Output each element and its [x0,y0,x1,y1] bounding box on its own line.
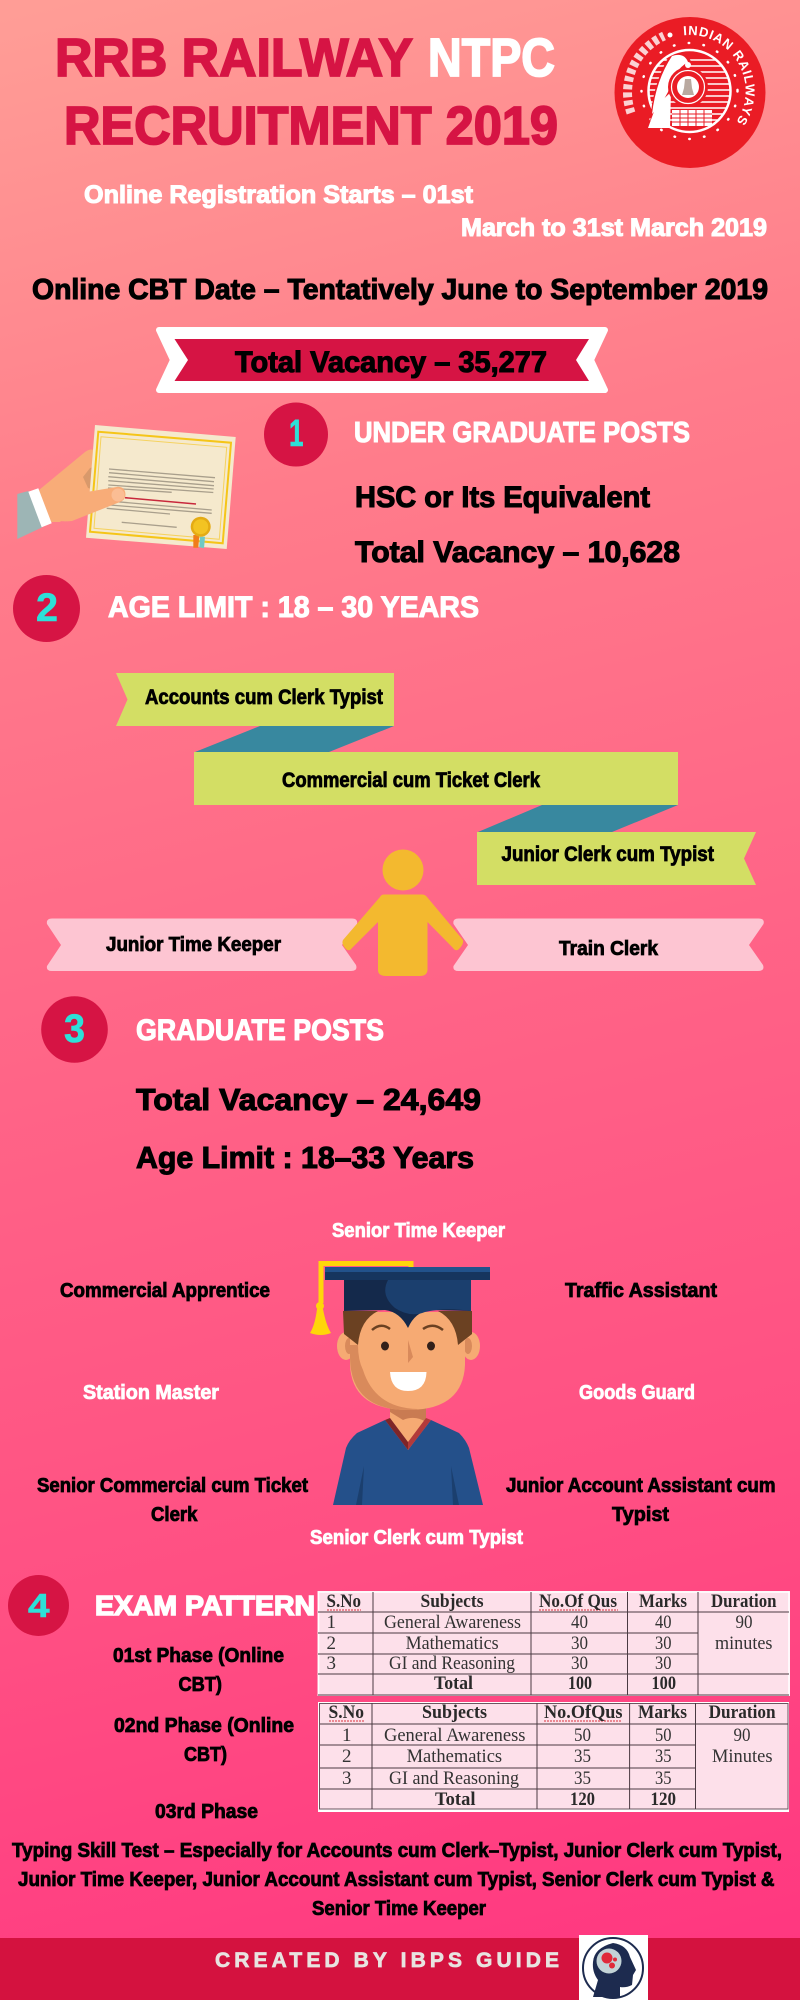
table: phase 1 pattern: Marks [639,1591,687,1612]
ribbon: junior time keeper: Junior Time Keeper [106,934,281,956]
heading: graduate posts: GRADUATE POSTS [136,1014,384,1047]
section 1: under graduate posts [264,402,690,569]
table: phase 2 pattern: 35 [655,1768,672,1789]
badge: 2: 2 [36,586,58,630]
title: NTPC [428,28,555,88]
section 3: graduate posts [41,996,481,1175]
table: phase 1 pattern: 1 [326,1612,336,1633]
text: online CBT date: Online CBT Date – Tentatively June to September 2019 [32,274,768,306]
icon: person [342,850,463,976]
table: phase 2 pattern: 3 [342,1768,352,1789]
table: phase 1 pattern: 40 [571,1612,588,1633]
section 4: exam pattern heading [8,1575,315,1636]
text: phase 2 label: 02nd Phase (Online [114,1715,294,1737]
ribbon: train clerk [453,918,764,971]
badge: 3: 3 [64,1007,85,1051]
label: commercial apprentice: Commercial Apprentice [60,1280,270,1302]
text: phase 2 label: CBT) [184,1744,227,1766]
badge: 4 [8,1575,69,1636]
label: senior commercial cum ticket clerk: Senior Commercial cum Ticket [37,1475,308,1497]
table: phase 1 pattern: Mathematics [406,1633,499,1654]
table: phase 1 pattern: S.No [326,1591,361,1612]
ribbon: commercial cum ticket clerk [194,752,678,805]
badge: 4: 4 [28,1587,50,1624]
table: phase 1 pattern: 100 [652,1673,676,1694]
table: phase 1 pattern: 90 [736,1612,752,1633]
icon: IBPS Guide head logo [579,1935,648,2000]
table: phase 2 pattern: 90 [734,1725,750,1746]
badge: 3 [41,996,108,1063]
table: phase 1 pattern: 3 [326,1653,336,1674]
table: phase 2 pattern: Mathematics [407,1746,502,1767]
table: phase 1 pattern: 30 [571,1633,588,1654]
banner: total vacancy [159,330,605,390]
label: senior commercial cum ticket clerk [37,1475,308,1526]
table: phase 2 pattern: Total [435,1789,476,1810]
connector strips [195,726,678,832]
table: phase 2 pattern: S.No [328,1702,364,1723]
table: phase 2 pattern: Subjects [422,1702,487,1723]
text: phase 2 label [114,1715,294,1766]
text: online registration dates: March to 31st March 2019 [461,214,767,242]
label: goods guard: Goods Guard [579,1382,695,1404]
title: RRB RAILWAY [55,28,413,88]
ribbon: junior clerk cum typist: Junior Clerk cum Typist [502,843,714,866]
table: phase 1 pattern: Subjects [420,1591,484,1612]
text: phase 1 label: 01st Phase (Online [113,1645,284,1667]
table: phase 2 pattern: 50 [655,1725,672,1746]
icon: graduate student [310,1264,490,1505]
table: phase 1 pattern: GI and Reasoning [389,1653,515,1674]
table: phase 1 pattern: 30 [655,1653,672,1674]
table: phase 2 pattern: 50 [574,1725,591,1746]
table: phase 1 pattern: 30 [571,1653,588,1674]
footer bar [0,1935,800,2000]
label: senior clerk cum typist: Senior Clerk cum Typist [310,1527,523,1549]
ribbon: accounts cum clerk typist: Accounts cum Clerk Typist [145,686,383,709]
table: phase 1 pattern: General Awareness [384,1612,521,1633]
table: phase 1 pattern: 30 [655,1633,672,1654]
badge: 2 [13,575,80,642]
label: senior commercial cum ticket clerk: Clerk [151,1504,198,1526]
label: junior account assistant cum typist: Junior Account Assistant cum [506,1475,776,1497]
icon: hand holding certificate [17,425,236,549]
badge: 1 [264,402,328,466]
text: age limit 18-33: Age Limit : 18–33 Years [136,1140,474,1175]
text: vacancy 24,649: Total Vacancy – 24,649 [136,1082,481,1117]
label: traffic assistant: Traffic Assistant [565,1280,717,1302]
ribbon: accounts cum clerk typist [116,673,394,726]
table: phase 1 pattern: 2 [326,1633,336,1654]
table: phase 2 pattern [318,1702,789,1812]
table: phase 2 pattern: 35 [574,1768,591,1789]
table: phase 1 pattern [318,1591,790,1696]
ribbon: commercial cum ticket clerk: Commercial cum Ticket Clerk [282,769,540,792]
text: qualification: HSC or Its Equivalent [355,481,650,514]
table: phase 2 pattern: 35 [655,1746,672,1767]
table: phase 1 pattern: 40 [655,1612,672,1633]
text: typing skill test note: Junior Time Keeper, Junior Account Assistant cum Typist, Senior Clerk cum Typist & [18,1869,774,1891]
table: phase 2 pattern: Marks [638,1702,687,1723]
text: phase 1 label [113,1645,284,1696]
heading: exam pattern: EXAM PATTERN [95,1590,315,1621]
label: junior account assistant cum typist: Typist [612,1504,669,1526]
section 2: age limit heading [13,575,479,642]
table: phase 1 pattern: Duration [711,1591,777,1612]
table: phase 2 pattern: 120 [650,1789,676,1810]
table: phase 1 pattern: Total [434,1673,473,1694]
title [55,28,558,156]
table: phase 2 pattern: General Awareness [384,1725,526,1746]
label: senior time keeper: Senior Time Keeper [332,1220,505,1242]
text: online registration dates [84,181,767,242]
table: phase 2 pattern: Duration [709,1702,776,1723]
text: phase 3 label: 03rd Phase [155,1801,258,1823]
table: phase 2 pattern: 1 [342,1725,352,1746]
icon: Indian Railways logo [614,17,766,168]
title: RECRUITMENT 2019 [64,96,558,156]
badge: 1: 1 [289,413,304,455]
table: phase 2 pattern: 2 [342,1746,352,1767]
banner: total vacancy: Total Vacancy – 35,277 [235,346,547,379]
table: phase 1 pattern: No.Of Qus [539,1591,617,1612]
table: phase 2 pattern: No.OfQus [544,1702,622,1723]
text: typing skill test note: Senior Time Keeper [312,1898,486,1920]
table: phase 2 pattern: GI and Reasoning [389,1768,519,1789]
text: vacancy 10,628: Total Vacancy – 10,628 [355,536,680,569]
table: phase 2 pattern: 35 [574,1746,591,1767]
labels: graduate posts list [37,1220,776,1549]
ribbon: junior time keeper [47,918,357,971]
heading: under graduate posts: UNDER GRADUATE POSTS [354,417,690,449]
table: phase 2 pattern: Minutes [712,1746,772,1767]
table: phase 2 pattern: 120 [570,1789,595,1810]
label: junior account assistant cum typist [506,1475,776,1526]
text: phase 1 label: CBT) [178,1674,222,1696]
heading: age limit: AGE LIMIT : 18 – 30 YEARS [108,591,479,624]
icon: Indian Railways logo: INDIAN RAILWAYS [684,26,755,125]
text: typing skill test note [12,1840,782,1920]
table: phase 1 pattern: minutes [715,1633,772,1654]
table: phase 1 pattern: 100 [568,1673,592,1694]
ribbon: train clerk: Train Clerk [559,938,659,960]
footer credit: CREATED BY IBPS GUIDE [215,1949,559,1972]
ribbon: junior clerk cum typist [477,832,756,885]
label: station master: Station Master [83,1382,219,1404]
text: online registration dates: Online Registration Starts – 01st [84,181,474,209]
ribbon chart: under graduate posts [47,673,764,976]
